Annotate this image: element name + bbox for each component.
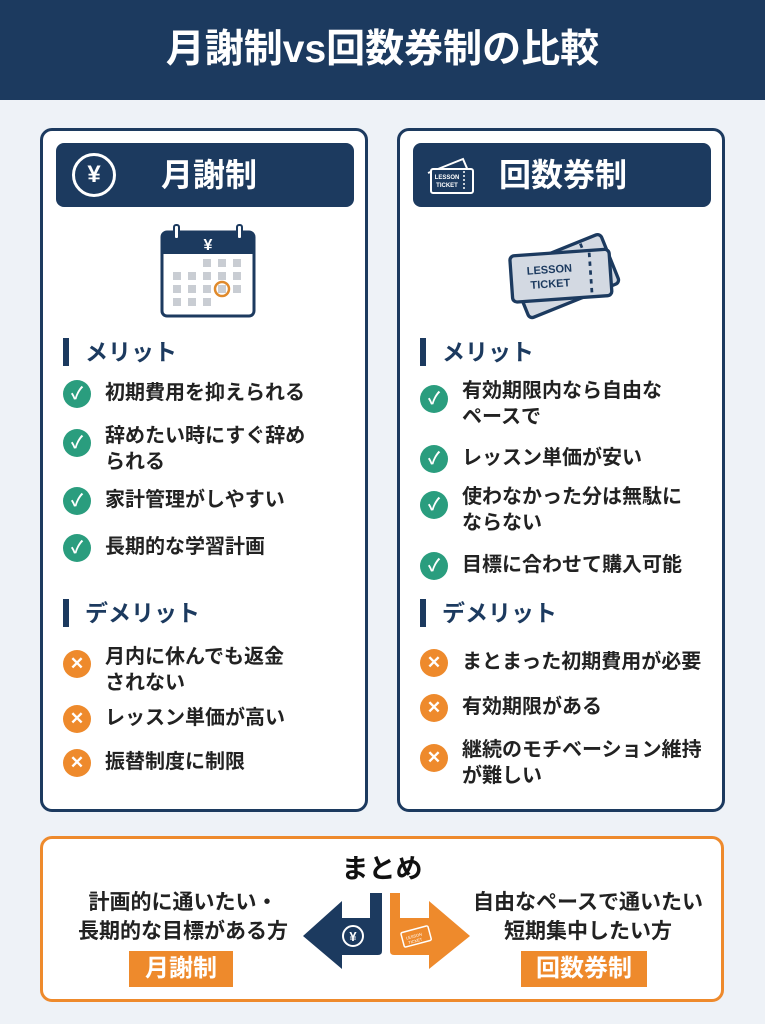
demerit list: 継続のモチベーション維持 bbox=[462, 739, 702, 761]
demerit list bbox=[63, 646, 285, 777]
merit list: ✓ bbox=[428, 389, 440, 408]
demerit list: ✕ bbox=[70, 654, 84, 673]
merit list bbox=[63, 380, 305, 562]
demerit list: ✕ bbox=[427, 653, 441, 672]
arrows bbox=[303, 893, 470, 969]
icon: small ticket bbox=[428, 158, 474, 194]
icon: lesson tickets: TICKET bbox=[530, 277, 571, 292]
merit list: 長期的な学習計画 bbox=[105, 536, 265, 558]
demerit list: されない bbox=[105, 672, 185, 694]
demerit list: 有効期限がある bbox=[462, 696, 602, 718]
icon: lesson tickets bbox=[508, 233, 620, 320]
merit list: ペースで bbox=[462, 406, 541, 428]
demerit list bbox=[420, 649, 702, 787]
summary right text: 短期集中したい方 bbox=[504, 920, 672, 943]
tag: ticket bbox=[521, 951, 647, 987]
demerit list: ✕ bbox=[70, 753, 84, 772]
merit list: ✓ bbox=[428, 556, 440, 575]
icon: lesson tickets: LESSON bbox=[526, 263, 572, 278]
icon: small ticket: LESSON bbox=[435, 175, 459, 181]
demerit list: ✕ bbox=[427, 698, 441, 717]
merit list: レッスン単価が安い bbox=[462, 447, 642, 469]
panel header: ticket: 回数券制 bbox=[499, 157, 627, 193]
icon: yen circle: ¥ bbox=[87, 161, 101, 188]
arrow: right orange bbox=[390, 893, 470, 969]
merit list: 辞めたい時にすぐ辞め bbox=[105, 425, 305, 447]
summary left text: 計画的に通いたい・ bbox=[88, 891, 278, 914]
merit list: 使わなかった分は無駄に bbox=[462, 486, 682, 508]
merit list: ✓ bbox=[71, 384, 83, 403]
panel header: monthly: 月謝制 bbox=[161, 157, 257, 193]
merit list: ✓ bbox=[71, 433, 83, 452]
summary right text: 自由なペースで通いたい bbox=[473, 891, 703, 914]
merit list: ✓ bbox=[428, 495, 440, 514]
merit list: ✓ bbox=[428, 449, 440, 468]
tag: ticket: 回数券制 bbox=[536, 955, 632, 982]
arrow: left navy: ¥ bbox=[349, 929, 357, 944]
merit list: 目標に合わせて購入可能 bbox=[462, 554, 682, 576]
demerit list: ✕ bbox=[427, 748, 441, 767]
merit list: 有効期限内なら自由な bbox=[462, 380, 662, 402]
summary heading: まとめ bbox=[342, 854, 422, 884]
summary left text: 長期的な目標がある方 bbox=[78, 920, 288, 943]
heading: demerits: デメリット bbox=[85, 600, 200, 626]
demerit list: が難しい bbox=[462, 765, 542, 787]
demerit list: まとまった初期費用が必要 bbox=[462, 651, 701, 673]
summary left text bbox=[78, 890, 288, 943]
icon: small ticket: TICKET bbox=[436, 183, 458, 189]
panel: ticket bbox=[397, 128, 725, 812]
arrow: right orange: TICKET bbox=[408, 936, 423, 945]
heading: merits: メリット bbox=[85, 339, 177, 365]
merit list: ✓ bbox=[71, 491, 83, 510]
demerit list: ✕ bbox=[70, 709, 84, 728]
merit list: 初期費用を抑えられる bbox=[105, 382, 305, 404]
arrow: left navy bbox=[303, 893, 382, 969]
merit list: ならない bbox=[462, 512, 542, 534]
tag: monthly: 月謝制 bbox=[145, 955, 217, 982]
icon: yen circle bbox=[72, 153, 116, 197]
panel: summary bbox=[40, 836, 724, 1002]
panel header: ticket bbox=[413, 143, 711, 207]
heading: merits: メリット bbox=[442, 339, 534, 365]
demerit list: レッスン単価が高い bbox=[105, 707, 285, 729]
arrow: right orange: LESSON bbox=[405, 931, 423, 941]
panel: monthly bbox=[40, 128, 368, 812]
heading: demerits: デメリット bbox=[442, 600, 557, 626]
demerit list: 振替制度に制限 bbox=[105, 751, 245, 773]
icon: calendar bbox=[160, 224, 256, 318]
merit list: ✓ bbox=[71, 538, 83, 557]
icon: calendar: ¥ bbox=[204, 237, 213, 254]
summary right text bbox=[473, 890, 703, 943]
merit list: 家計管理がしやすい bbox=[105, 489, 285, 511]
panel header: monthly bbox=[56, 143, 354, 207]
title: 月謝制vs回数券制の比較 bbox=[166, 28, 599, 71]
tag: monthly bbox=[129, 951, 233, 987]
merit list: られる bbox=[105, 451, 165, 473]
title bbox=[0, 0, 765, 100]
demerit list: 月内に休んでも返金 bbox=[105, 646, 284, 668]
merit list bbox=[420, 380, 682, 580]
